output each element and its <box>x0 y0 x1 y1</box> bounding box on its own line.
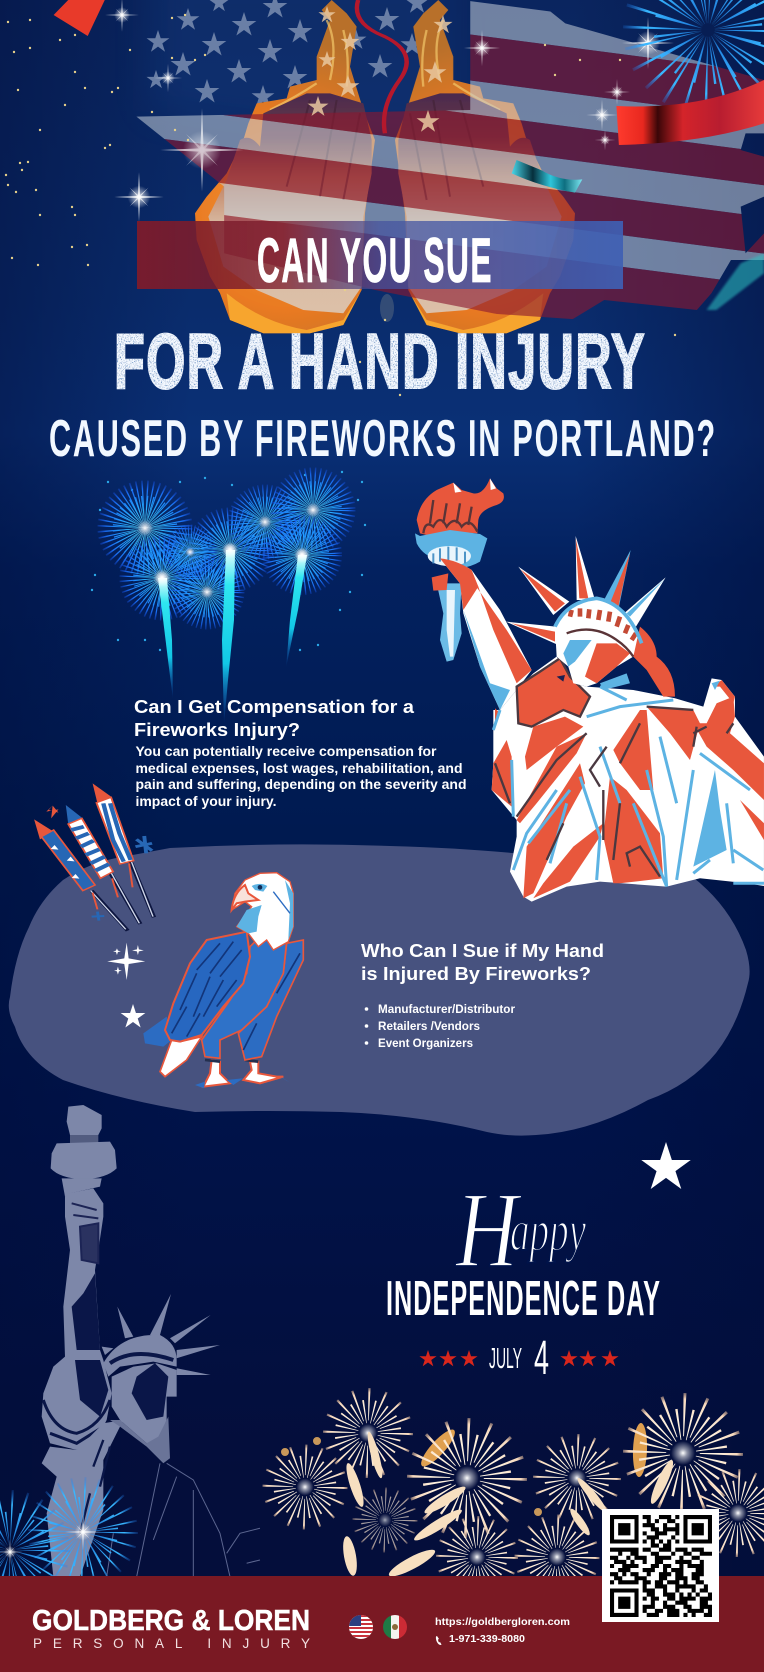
text block: compensation <box>134 696 466 809</box>
firework bottom left blue <box>0 1502 113 1582</box>
logo: GOLDBERG & LOREN <box>32 1605 310 1637</box>
contact details <box>435 1616 570 1645</box>
icon: us flag <box>349 1615 373 1639</box>
statue robe <box>492 657 764 902</box>
statue head <box>555 598 675 697</box>
date row: july 4 with stars <box>419 1332 619 1385</box>
icon: eagle <box>143 873 303 1088</box>
text block: who can I sue: Who Can I Sue if My Hand <box>361 940 604 961</box>
eagle tail <box>143 1017 202 1077</box>
statue of liberty illustration <box>415 478 764 902</box>
text block: compensation: pain and suffering, depending on the severity and <box>136 777 466 792</box>
eagle wing <box>165 932 300 1050</box>
date row: july 4 with stars: JULY <box>489 1343 522 1375</box>
sparkles and golden specks in the sky <box>6 0 675 395</box>
text block: who can I sue: Event Organizers <box>378 1038 473 1050</box>
eagle legs and talons <box>195 1060 290 1088</box>
panel: who can I sue blob <box>9 844 750 1136</box>
eagle right wing and leg <box>238 940 303 1060</box>
left hand <box>195 0 375 333</box>
text block: compensation: You can potentially receive compensation for <box>136 744 437 759</box>
text block: compensation: impact of your injury. <box>136 794 276 809</box>
greeting: happy: appy <box>510 1198 586 1263</box>
text block: compensation: Can I Get Compensation for a <box>134 696 415 717</box>
silhouette torch <box>51 1105 117 1197</box>
statue raised arm <box>440 558 532 710</box>
firework top right <box>662 0 754 76</box>
flag canton with stars <box>146 0 450 150</box>
banner behind headline <box>137 221 623 289</box>
star top right of greeting <box>641 1142 691 1189</box>
text block: who can I sue <box>361 940 604 1050</box>
text block: who can I sue: is Injured By Fireworks? <box>361 963 591 984</box>
text block: compensation: Fireworks Injury? <box>134 719 300 740</box>
footer bar <box>0 1576 764 1672</box>
title line: can you sue: CAN YOU SUE <box>257 226 493 296</box>
eagle body <box>202 933 287 1058</box>
date row: july 4 with stars: 4 <box>534 1332 549 1385</box>
contact details: https://goldbergloren.com <box>435 1616 570 1628</box>
logo <box>32 1605 310 1651</box>
icon: mexico flag <box>383 1615 407 1639</box>
eagle head <box>232 873 293 950</box>
statue torch <box>415 478 504 662</box>
confetti ribbons <box>54 0 764 310</box>
silhouette crown <box>102 1294 220 1443</box>
golden fireworks <box>278 1404 764 1584</box>
flag stripes overlay <box>136 1 764 320</box>
icon: burning hands <box>195 0 575 333</box>
silhouette arm and sleeve <box>42 1188 112 1450</box>
silhouette drapery <box>42 1417 260 1577</box>
contact details: 1-971-339-8080 <box>449 1633 525 1645</box>
greeting: happy: H <box>454 1171 522 1290</box>
blue fireworks cluster <box>92 472 365 725</box>
icon: white star <box>121 1004 145 1028</box>
text block: compensation: medical expenses, lost wages, rehabilitation, and <box>136 761 462 776</box>
text block: who can I sue: Manufacturer/Distributor <box>378 1004 516 1016</box>
icon: sparkles <box>107 943 145 980</box>
statue left hand and sleeve <box>517 658 590 727</box>
rockets <box>34 783 154 931</box>
icon: silhouette statue of liberty <box>42 1105 260 1577</box>
statue crown spikes <box>506 536 666 644</box>
qr code <box>602 1509 719 1622</box>
stars over the hands <box>308 6 453 132</box>
logo: PERSONAL INJURY <box>33 1636 310 1651</box>
right hand <box>395 0 575 333</box>
greeting: happy <box>454 1171 586 1290</box>
text block: who can I sue: Retailers /Vendors <box>378 1021 480 1033</box>
